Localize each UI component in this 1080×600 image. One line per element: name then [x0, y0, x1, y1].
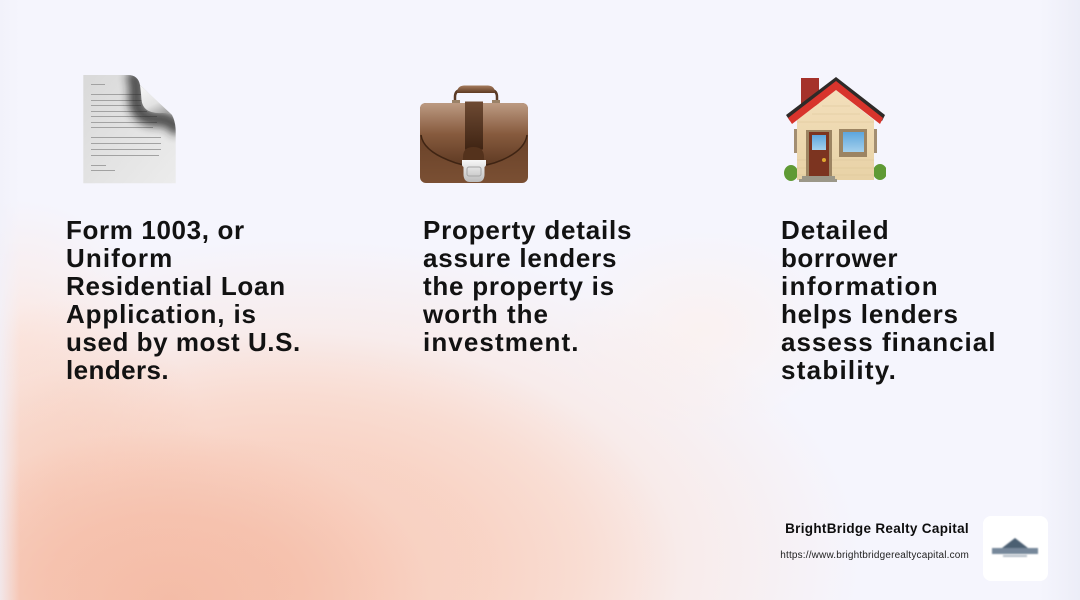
icon: briefcase [420, 86, 528, 183]
text: borrower information: borrower [781, 243, 898, 273]
text: form 1003: Residential Loan [66, 271, 286, 301]
text: property details: Property details [423, 215, 632, 245]
icon: logo [991, 537, 1039, 558]
text: borrower information [781, 215, 996, 385]
text: form 1003: Application, is [66, 299, 257, 329]
text: borrower information: helps lenders [781, 299, 959, 329]
text: property details: assure lenders [423, 243, 617, 273]
text: borrower information: information [781, 271, 939, 301]
icon: house [784, 77, 886, 182]
text: property details: worth the [423, 299, 549, 329]
text: property details: investment. [423, 327, 580, 357]
text: form 1003: lenders. [66, 355, 169, 385]
text: form 1003: Form 1003, or [66, 215, 245, 245]
logo tile [983, 516, 1048, 581]
text: borrower information: assess financial [781, 327, 996, 357]
text: property details: the property is [423, 271, 615, 301]
text: borrower information: stability. [781, 355, 897, 385]
text: property details [422, 215, 632, 357]
text: form 1003: used by most U.S. [66, 327, 301, 357]
handle [452, 86, 500, 103]
icon: document [83, 75, 176, 184]
brand url: https://www.brightbridgerealtycapital.com [780, 550, 969, 561]
text: form 1003: Uniform [66, 243, 173, 273]
text: borrower information: Detailed [781, 215, 890, 245]
text: form 1003 [66, 215, 301, 385]
brand name: BrightBridge Realty Capital [785, 521, 969, 536]
